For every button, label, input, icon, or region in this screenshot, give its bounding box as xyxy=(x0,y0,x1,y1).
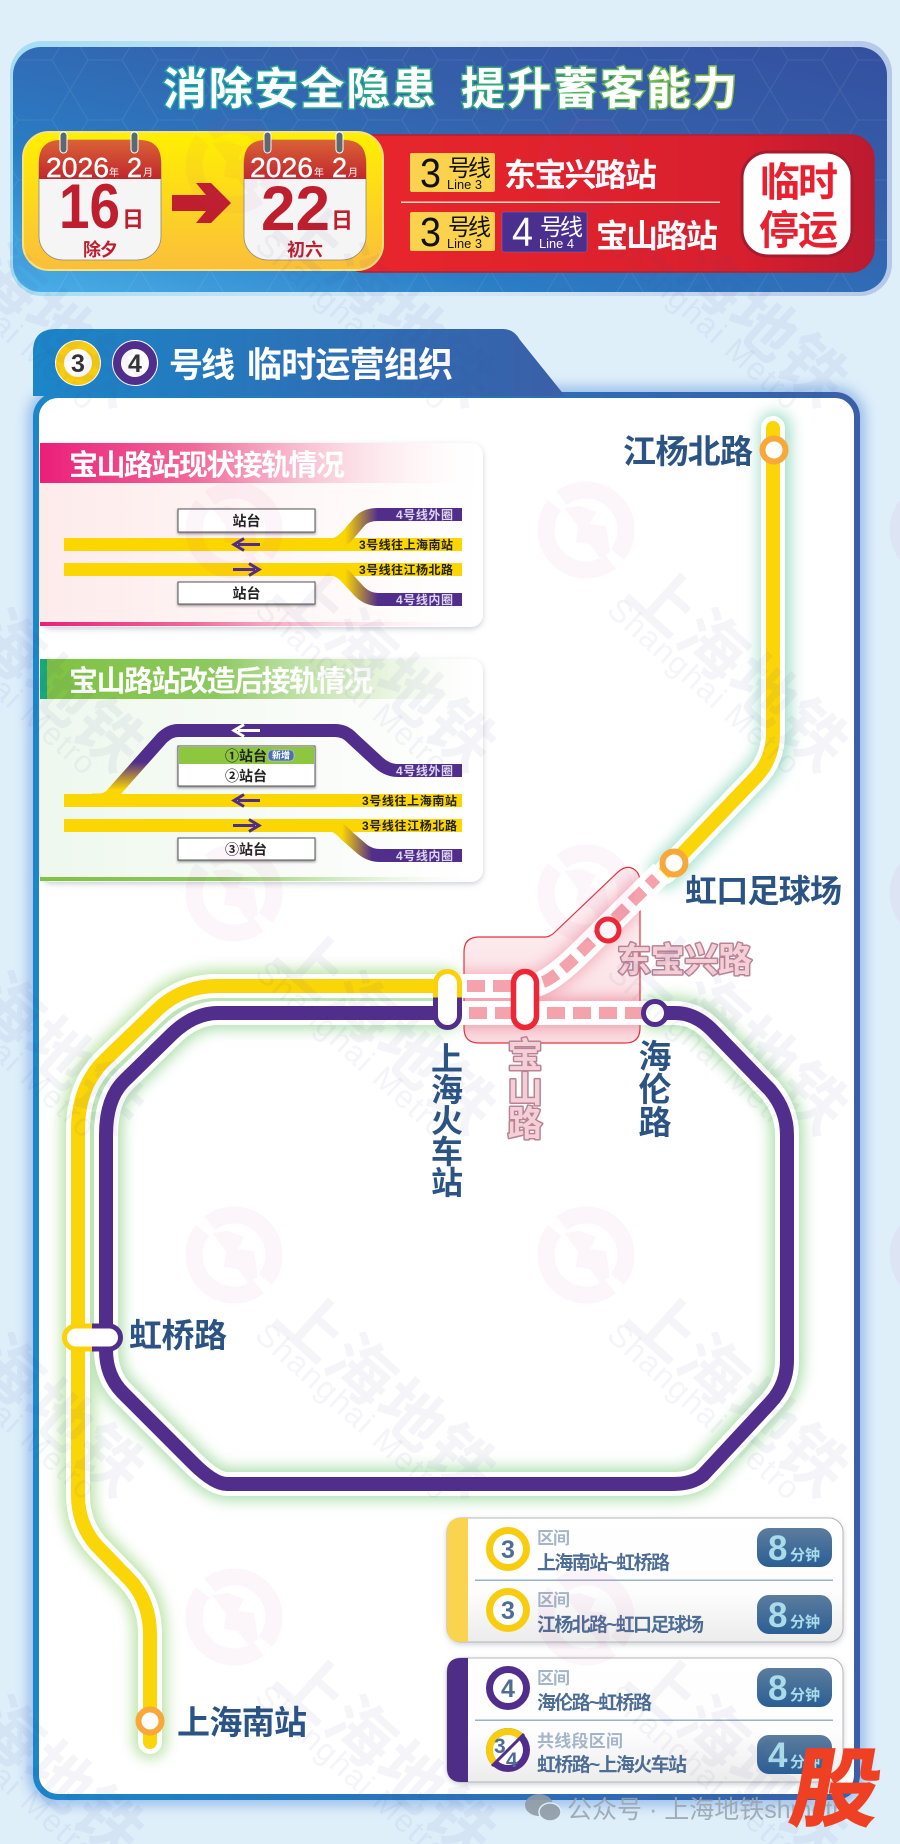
calendar: end date: 初六 xyxy=(287,239,323,260)
background watermark: 上海地铁 xyxy=(614,551,863,785)
row: Hailun to Hongqiao: 区间 xyxy=(537,1669,570,1688)
row: Shanghai South to Hongqiao: 分钟 xyxy=(790,1546,820,1564)
station: Shanghai Railway Station xyxy=(431,972,463,1201)
calendar: start date: 2 xyxy=(127,152,142,183)
new platform tag: 新增 xyxy=(272,750,290,760)
row: Hailun to Hongqiao: 8 xyxy=(768,1669,787,1708)
track diagram: 4号线外圈 xyxy=(396,507,453,522)
track diagram: ②站台 xyxy=(225,768,267,784)
panel: current track layout xyxy=(40,443,483,627)
track diagram: 3号线往江杨北路 xyxy=(359,562,453,577)
line 3 badge: Dongbaoxing Road: 3 xyxy=(420,150,441,196)
section title: 临时运营组织 xyxy=(247,346,453,385)
track diagram: ①站台 xyxy=(225,748,267,764)
panel heading xyxy=(40,659,483,699)
temporary closure box: 停运 xyxy=(759,209,838,253)
track diagram xyxy=(64,724,462,863)
track diagram xyxy=(64,507,462,607)
track diagram: 4号线内圈 xyxy=(396,592,453,607)
station: Hongqiao Road: 虹桥路 xyxy=(129,1317,227,1354)
line 4 badge: Baoshan Road: Line 4 xyxy=(539,237,574,251)
temporary closure box xyxy=(742,152,852,256)
arrow xyxy=(172,183,231,223)
line 3 badge: Dongbaoxing Road xyxy=(410,150,495,196)
row: Jiangyang North to Hongkou: 分钟 xyxy=(790,1613,820,1631)
calendar: end date: 2 xyxy=(332,152,347,183)
station: Hongqiao Road xyxy=(64,1317,227,1354)
calendar: start date: 日 xyxy=(122,207,144,232)
station: Hailun Road xyxy=(638,1002,672,1141)
row: Hailun to Hongqiao xyxy=(490,1668,832,1714)
calendar: start date xyxy=(39,132,161,260)
background watermark: 上海地铁 xyxy=(614,186,863,420)
station: Baoshan Road (closed): 路 xyxy=(507,1105,543,1144)
row: Shanghai South to Hongqiao: 8 xyxy=(768,1529,787,1568)
line 4 badge: Baoshan Road xyxy=(502,209,587,255)
track diagram: 3号线往上海南站 xyxy=(362,793,457,808)
calendar: end date: 月 xyxy=(348,167,358,179)
red closure band xyxy=(340,135,874,272)
background watermark: Shanghai Metro xyxy=(249,226,456,418)
header panel xyxy=(10,41,892,296)
station: Jiangyang North Road: 江杨北路 xyxy=(623,433,753,470)
background watermark: Shanghai Metro xyxy=(601,226,808,418)
background watermark: 上海地铁 xyxy=(614,914,863,1148)
temporary closure box: 临时 xyxy=(760,161,838,205)
station: Hailun Road: 伦 xyxy=(638,1071,672,1108)
track diagram: 3号线往上海南站 xyxy=(359,537,453,552)
row: Jiangyang North to Hongkou: 3 xyxy=(501,1597,515,1625)
row: Jiangyang North to Hongkou: 江杨北路~虹口足球场 xyxy=(537,1614,704,1636)
line 4 roundel: 4 xyxy=(128,350,142,378)
line 3 badge: Dongbaoxing Road: 号线 xyxy=(448,155,491,181)
line 3 badge: Baoshan Road: 3 xyxy=(420,209,441,255)
calendar: start date: 2026 xyxy=(46,152,109,183)
row: shared section Hongqiao to Shanghai Station: 4 xyxy=(506,1749,518,1772)
background watermark: 上海地铁 xyxy=(262,551,511,785)
track diagram: ③站台 xyxy=(225,842,267,858)
map panel frame xyxy=(36,395,857,1797)
yellow date band xyxy=(23,132,383,270)
headline: 消除安全隐患 xyxy=(163,65,436,114)
station: Baoshan Road (closed): 宝 xyxy=(507,1037,543,1076)
corner mark: 股 xyxy=(784,1743,889,1838)
station: Shanghai South Station: 上海南站 xyxy=(177,1704,307,1741)
background watermark: 上海地铁 xyxy=(262,1276,511,1510)
card: line 4 run times xyxy=(447,1658,843,1782)
background watermark: Shanghai Metro xyxy=(601,954,808,1146)
row: Shanghai South to Hongqiao xyxy=(490,1528,832,1574)
line 4 badge: Baoshan Road: 4 xyxy=(512,209,533,255)
track diagram: 4号线内圈 xyxy=(396,848,453,863)
background watermark: Shanghai Metro xyxy=(249,591,456,783)
station: Hongkou Football Stadium xyxy=(662,852,842,909)
panel heading: 宝山路站现状接轨情况 xyxy=(69,449,345,482)
station: Shanghai Railway Station: 海 xyxy=(431,1072,463,1108)
line 3 badge: Baoshan Road xyxy=(410,209,495,255)
line 3 badge: Baoshan Road: Line 3 xyxy=(447,237,482,251)
calendar: start date: 16 xyxy=(59,172,120,242)
background watermark: Shanghai Metro xyxy=(249,954,456,1146)
calendar: end date xyxy=(244,132,366,260)
row: Shanghai South to Hongqiao: 区间 xyxy=(537,1529,570,1548)
panel: post-renovation track layout xyxy=(40,659,483,882)
row: Shanghai South to Hongqiao: 上海南站~虹桥路 xyxy=(537,1552,670,1574)
line 3 roundel xyxy=(55,340,101,386)
section tab xyxy=(33,329,565,396)
line 3 roundel: 3 xyxy=(71,350,85,378)
panel heading: 宝山路站改造后接轨情况 xyxy=(69,665,373,698)
row: shared section Hongqiao to Shanghai Station: 虹桥路~上海火车站 xyxy=(537,1753,687,1776)
background watermark: 上海地铁 xyxy=(614,1276,863,1510)
station: Shanghai Railway Station: 车 xyxy=(431,1134,463,1170)
background watermark: Shanghai Metro xyxy=(601,1316,808,1508)
station name: Dongbaoxing Road: 东宝兴路站 xyxy=(504,157,657,193)
background watermark: Shanghai Metro xyxy=(249,1316,456,1508)
Baoshan closure zone xyxy=(463,866,641,1044)
station name: Baoshan Road: 宝山路站 xyxy=(596,218,718,254)
section title: 号线 xyxy=(169,347,235,385)
line 4 badge: Baoshan Road: 号线 xyxy=(540,214,583,240)
station: Dongbaoxing Road (closed) xyxy=(597,919,752,980)
calendar: start date: 月 xyxy=(143,167,153,179)
calendar: end date: 2026 xyxy=(250,152,313,183)
station: Hailun Road: 路 xyxy=(638,1104,672,1141)
calendar: end date: 日 xyxy=(331,208,353,233)
row: shared section Hongqiao to Shanghai Station: 共线段区间 xyxy=(537,1731,623,1751)
calendar: end date: 年 xyxy=(314,166,324,179)
track diagram: 3号线往江杨北路 xyxy=(362,818,457,833)
divider xyxy=(401,202,720,203)
row: Hailun to Hongqiao: 分钟 xyxy=(790,1686,820,1704)
row: shared section Hongqiao to Shanghai Station xyxy=(486,1728,832,1776)
row: Jiangyang North to Hongkou xyxy=(490,1591,832,1636)
calendar: start date: 除夕 xyxy=(83,239,118,260)
station: Shanghai Railway Station: 站 xyxy=(431,1165,463,1201)
station: Shanghai Railway Station: 火 xyxy=(431,1103,463,1139)
station: Hailun Road: 海 xyxy=(638,1038,672,1075)
background watermark: 上海地铁 xyxy=(262,914,511,1148)
line glow xyxy=(78,428,787,1742)
row: shared section Hongqiao to Shanghai Station: 分钟 xyxy=(790,1753,820,1771)
track diagram: 站台 xyxy=(232,586,260,602)
station: Baoshan Road (closed): 山 xyxy=(507,1071,543,1110)
track diagram: 站台 xyxy=(232,513,260,529)
new platform tag xyxy=(268,750,294,761)
card: line 3 run times xyxy=(447,1518,843,1642)
calendar: end date: 22 xyxy=(261,174,330,244)
line 4 roundel xyxy=(112,340,158,386)
row: Jiangyang North to Hongkou: 区间 xyxy=(537,1591,570,1610)
headline xyxy=(163,65,737,114)
closed section: dashed tracks xyxy=(455,872,662,1013)
calendar: start date: 年 xyxy=(109,166,119,179)
row: shared section Hongqiao to Shanghai Station: 3 xyxy=(494,1735,506,1758)
headline: 提升蓄客能力 xyxy=(461,65,737,114)
line 3: yellow route xyxy=(78,428,773,1742)
station: Dongbaoxing Road (closed): 东宝兴路 xyxy=(617,942,752,980)
account credit with WeChat icon: 公众号 · 上海地铁shmetro xyxy=(567,1796,855,1824)
icon: WeChat xyxy=(525,1794,561,1821)
station: Hongkou Football Stadium: 虹口足球场 xyxy=(685,873,842,909)
row: Hailun to Hongqiao: 海伦路~虹桥路 xyxy=(537,1691,652,1714)
row: Hailun to Hongqiao: 4 xyxy=(501,1675,515,1703)
line 4: purple loop xyxy=(106,1013,787,1484)
station: Shanghai Railway Station: 上 xyxy=(431,1041,463,1077)
row: shared section Hongqiao to Shanghai Station: 4 xyxy=(768,1736,788,1775)
track diagram: 4号线外圈 xyxy=(396,763,453,778)
line 3 badge: Baoshan Road: 号线 xyxy=(448,214,491,240)
background watermark: 上海地铁 xyxy=(262,186,511,420)
row: Jiangyang North to Hongkou: 8 xyxy=(768,1596,787,1635)
panel heading xyxy=(40,443,483,483)
line 3 badge: Dongbaoxing Road: Line 3 xyxy=(447,178,482,192)
row: Shanghai South to Hongqiao: 3 xyxy=(501,1536,515,1564)
station: Baoshan Road (closed) xyxy=(507,972,543,1144)
background watermark: Shanghai Metro xyxy=(601,591,808,783)
